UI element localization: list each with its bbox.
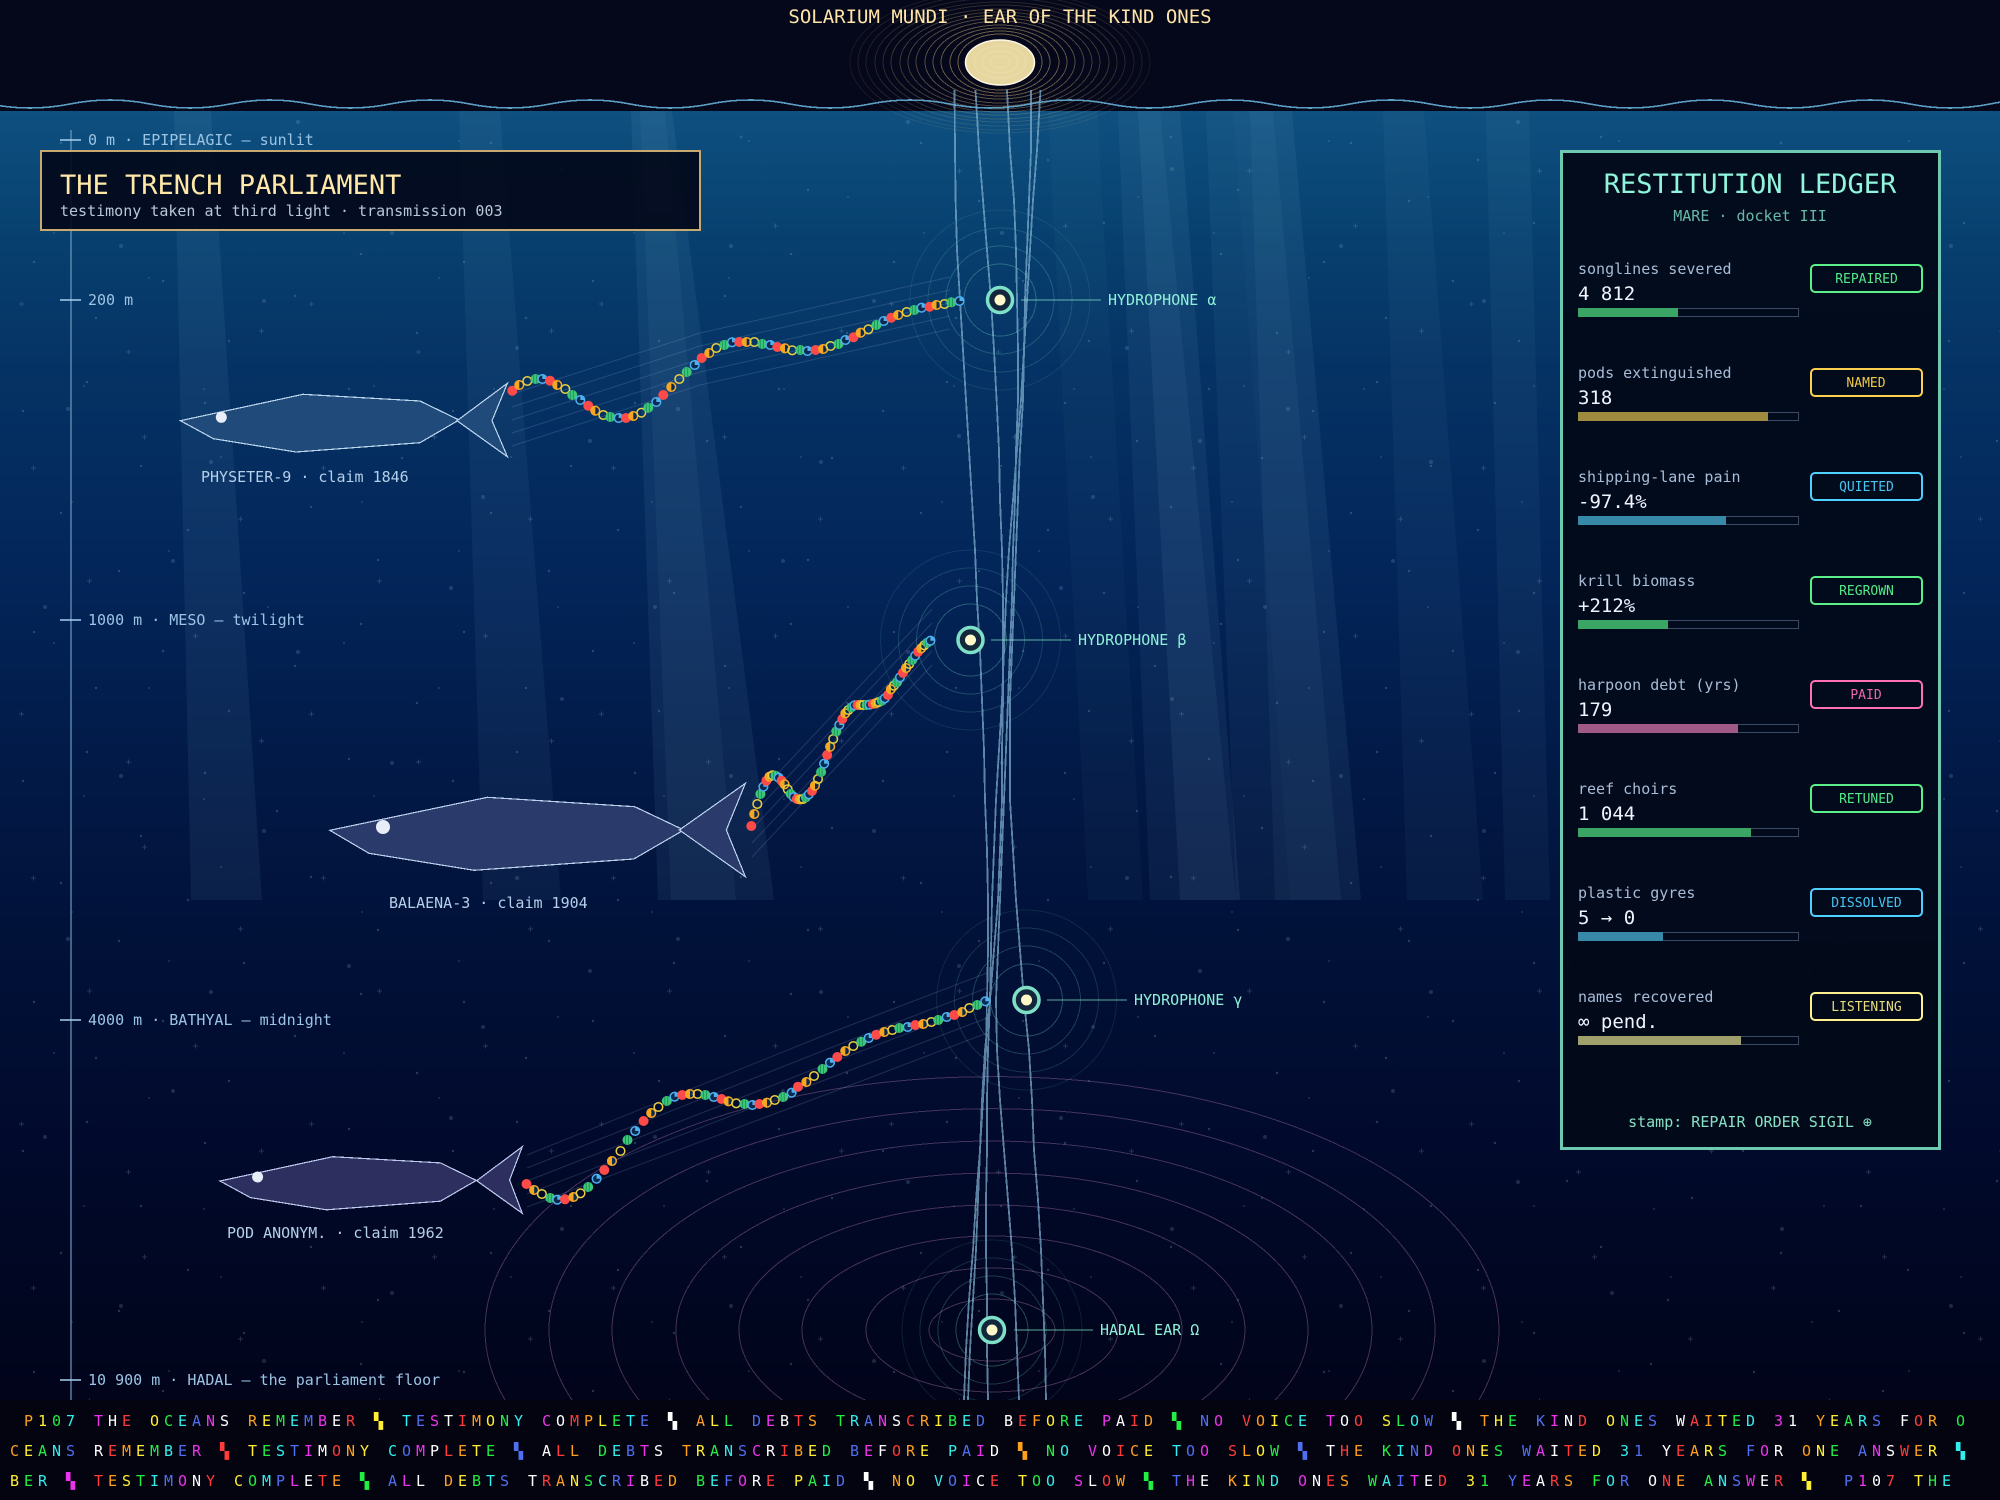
depth tick: 200 m: 200 m xyxy=(88,291,133,309)
hydrophone gamma: HYDROPHONE γ xyxy=(1134,991,1242,1009)
top sky band xyxy=(0,0,2000,111)
hydrophone alpha xyxy=(988,288,1216,312)
row: pods extinguished xyxy=(1578,364,1922,421)
depth tick: 1000 m: 1000 m · MESO — twilight xyxy=(88,611,305,629)
sun disc xyxy=(966,40,1034,85)
ticker row 2: CEANS REMEMBER ▚ TESTIMONY COMPLETE ▚ ALL DEBTS TRANSCRIBED BEFORE PAID ▚ NO VOICE TOO SLOW ▚ THE KIND ONES WAITED 31 YEARS FOR ONE ANSWER ▚ xyxy=(10,1442,1970,1460)
row: names recovered xyxy=(1578,988,1922,1045)
hydrophone beta: HYDROPHONE β xyxy=(1078,631,1186,649)
row: names recovered: names recovered xyxy=(1578,988,1713,1006)
row: reef choirs: RETUNED xyxy=(1839,792,1894,807)
whale: Balaena-3 xyxy=(330,783,745,912)
row: shipping-lane pain: -97.4% xyxy=(1578,491,1647,513)
row: plastic gyres: DISSOLVED xyxy=(1831,896,1902,911)
row: shipping-lane pain: QUIETED xyxy=(1839,480,1894,495)
hydrophone alpha: HYDROPHONE α xyxy=(1108,291,1216,309)
subtitle: testimony taken at third light · transmission 003 xyxy=(60,202,503,220)
light shafts xyxy=(174,111,1550,900)
row: krill biomass xyxy=(1578,572,1922,629)
hydrophone gamma xyxy=(1014,988,1242,1012)
song beta: trace lines xyxy=(752,609,932,857)
row: krill biomass: REGROWN xyxy=(1839,584,1894,599)
row: songlines severed: songlines severed xyxy=(1578,260,1732,278)
ticker row 3: BER ▚ TESTIMONY COMPLETE ▚ ALL DEBTS TRANSCRIBED BEFORE PAID ▚ NO VOICE TOO SLOW ▚ THE KIND ONES WAITED 31 YEARS FOR ONE ANSWER ▚ P107 THE xyxy=(10,1472,1956,1490)
depth tick: 200 m xyxy=(60,291,133,309)
ledger stamp: stamp: REPAIR ORDER SIGIL ⊕ xyxy=(1628,1113,1872,1131)
ledger title: RESTITUTION LEDGER xyxy=(1604,169,1897,200)
row: pods extinguished: 318 xyxy=(1578,387,1612,409)
main title: THE TRENCH PARLIAMENT xyxy=(60,170,401,201)
row: reef choirs xyxy=(1578,780,1922,837)
hydrophone beta xyxy=(958,628,1186,652)
song beta: bead string xyxy=(746,636,935,831)
row: plastic gyres xyxy=(1578,884,1922,941)
header title: SOLARIUM MUNDI · EAR OF THE KIND ONES xyxy=(788,6,1212,28)
row: plastic gyres: plastic gyres xyxy=(1578,884,1695,902)
hadal ear omega: HADAL EAR Ω xyxy=(1100,1321,1199,1339)
row: harpoon debt: PAID xyxy=(1850,688,1882,703)
song gamma: bead string xyxy=(522,996,990,1204)
hydrophone gamma rings xyxy=(936,910,1116,1090)
hydrophone alpha rings xyxy=(910,210,1090,390)
depth tick: 4000 m: 4000 m · BATHYAL — midnight xyxy=(88,1011,332,1029)
ticker row 1: P107 THE OCEANS REMEMBER ▚ TESTIMONY COMPLETE ▚ ALL DEBTS TRANSCRIBED BEFORE PAID ▚ NO VOICE TOO SLOW ▚ THE KIND ONES WAITED 31 YEARS FOR O xyxy=(24,1412,1970,1430)
whale label: BALAENA-3 · claim 1904 xyxy=(389,894,588,912)
row: harpoon debt xyxy=(1578,676,1922,733)
ticker band xyxy=(0,1400,2000,1500)
row: names recovered: LISTENING xyxy=(1831,1000,1902,1015)
row: songlines severed xyxy=(1578,260,1922,317)
depth scale xyxy=(60,130,440,1400)
song gamma: trace lines xyxy=(527,973,987,1207)
row: pods extinguished: NAMED xyxy=(1846,376,1886,391)
row: reef choirs: reef choirs xyxy=(1578,780,1677,798)
row: reef choirs: 1 044 xyxy=(1578,803,1635,825)
row: songlines severed: REPAIRED xyxy=(1835,272,1898,287)
song alpha: bead string xyxy=(507,296,964,423)
sea surface wave xyxy=(0,100,2000,108)
hadal ripple rings xyxy=(485,1077,1499,1400)
whale label: PHYSETER-9 · claim 1846 xyxy=(201,468,409,486)
depth tick: 10 900 m: 10 900 m · HADAL — the parliament floor xyxy=(88,1371,440,1389)
row: pods extinguished: pods extinguished xyxy=(1578,364,1732,382)
whale: Pod Anonym xyxy=(220,1147,522,1242)
row: krill biomass: krill biomass xyxy=(1578,572,1695,590)
whale label: POD ANONYM. · claim 1962 xyxy=(227,1224,444,1242)
row: plastic gyres: 5 → 0 xyxy=(1578,907,1635,929)
whale: Physeter-9 xyxy=(180,383,507,486)
row: names recovered: ∞ pend. xyxy=(1578,1011,1658,1033)
signal beams from the sun xyxy=(954,90,1046,1400)
row: harpoon debt: 179 xyxy=(1578,699,1612,721)
hadal ear rings xyxy=(902,1240,1082,1420)
hadal ear omega xyxy=(980,1318,1199,1342)
song alpha: trace lines xyxy=(512,277,950,446)
depth tick: 0 m: 0 m · EPIPELAGIC — sunlit xyxy=(88,131,314,149)
title panel xyxy=(41,151,700,230)
ledger subtitle: MARE · docket III xyxy=(1673,207,1827,225)
row: shipping-lane pain: shipping-lane pain xyxy=(1578,468,1741,486)
panel: restitution ledger xyxy=(1562,152,1940,1148)
row: shipping-lane pain xyxy=(1578,468,1922,525)
sun rings xyxy=(850,0,1150,133)
row: krill biomass: +212% xyxy=(1578,595,1636,617)
hydrophone beta rings xyxy=(880,550,1060,730)
row: songlines severed: 4 812 xyxy=(1578,283,1635,305)
row: harpoon debt: harpoon debt (yrs) xyxy=(1578,676,1741,694)
